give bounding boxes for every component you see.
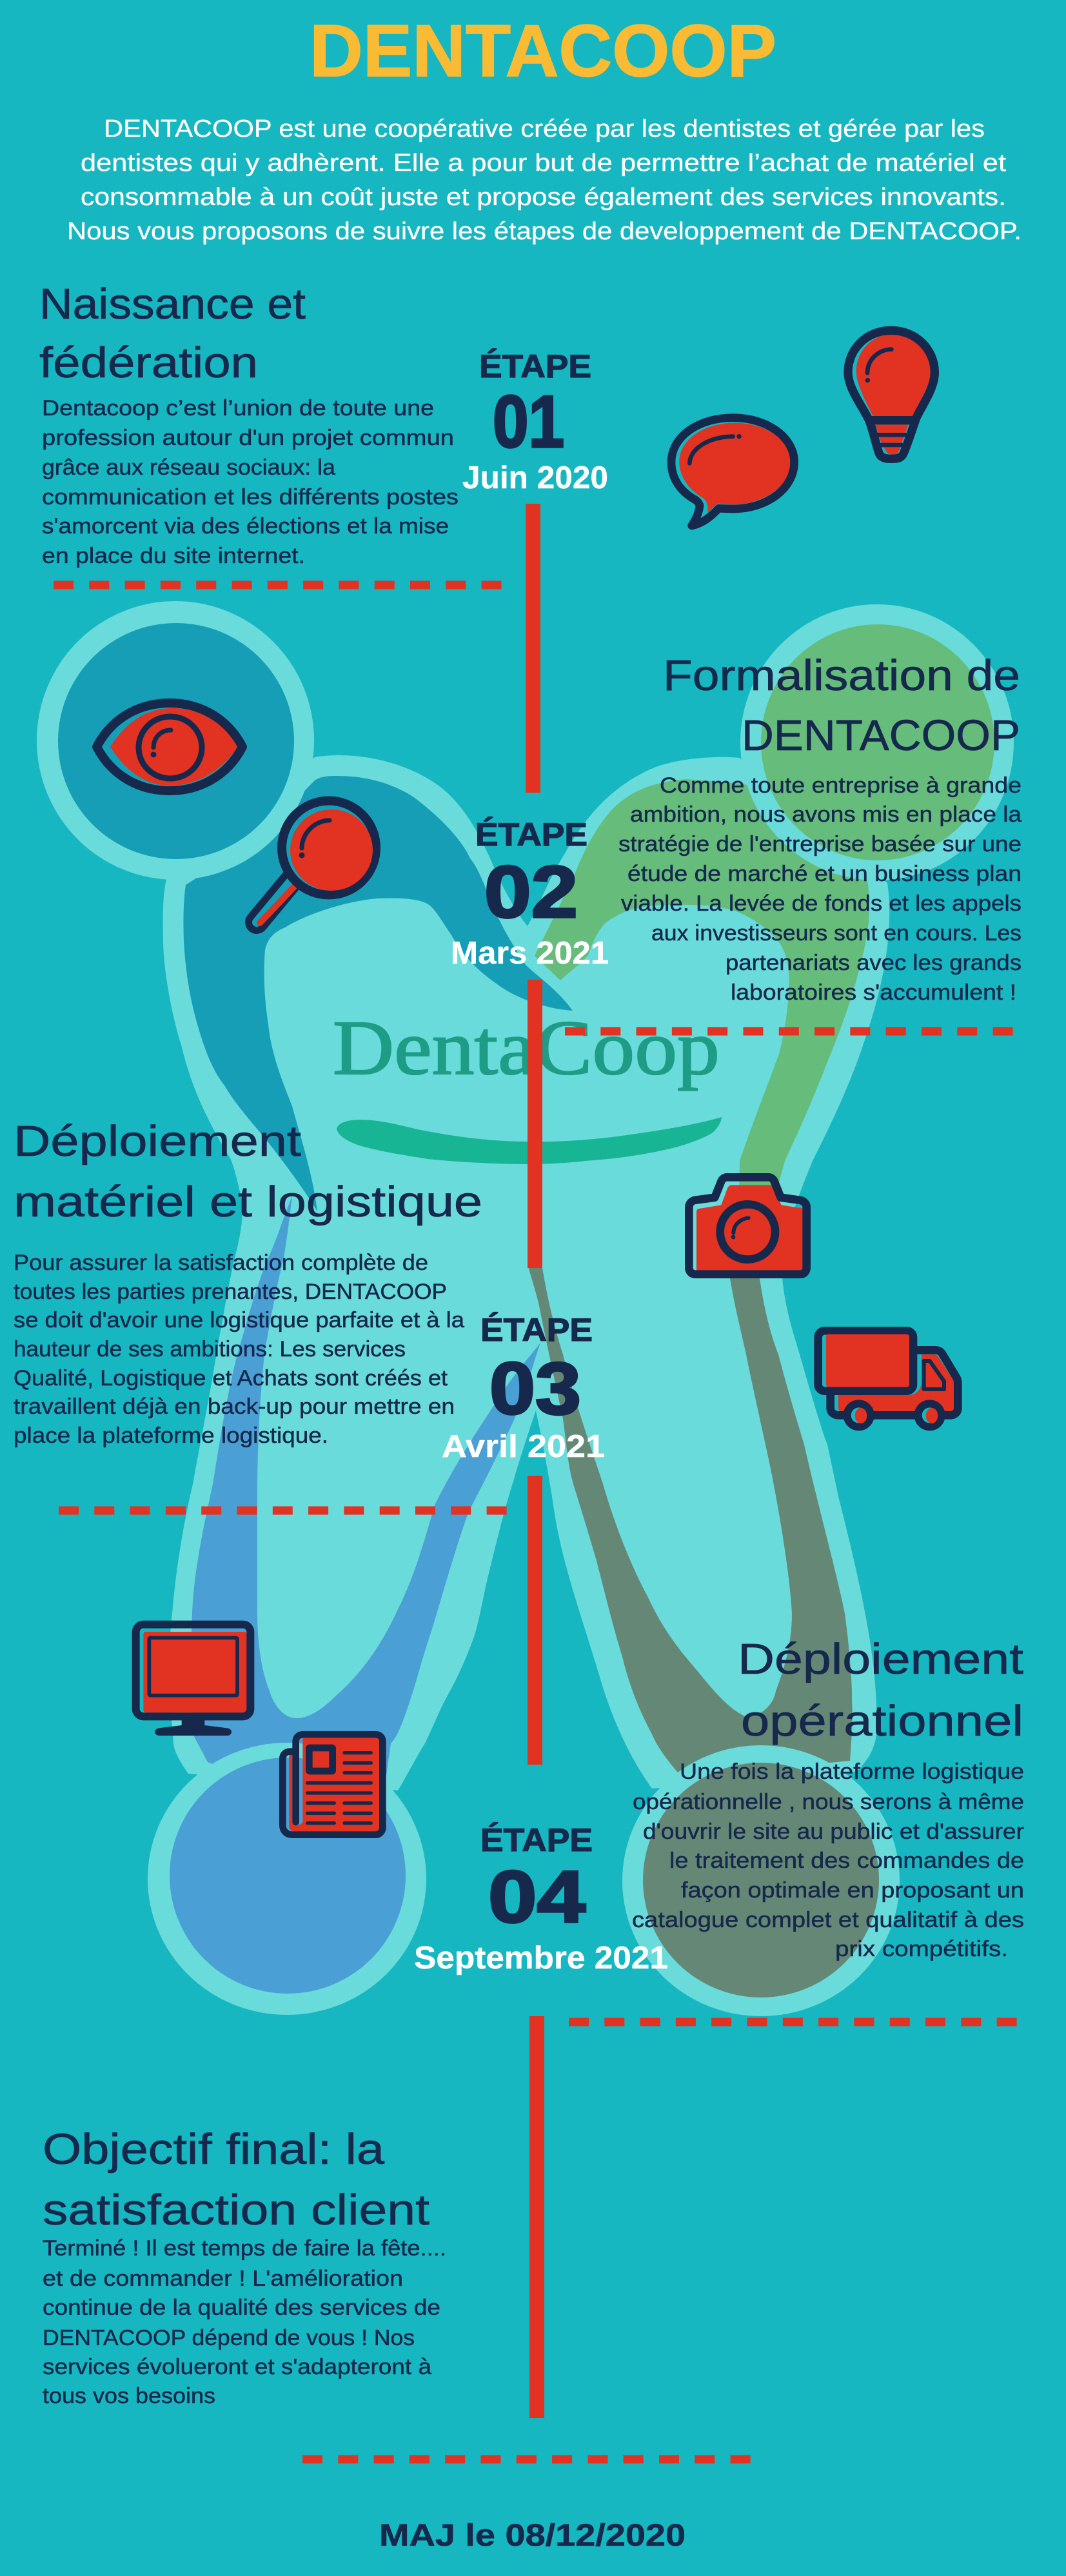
text block: step 3: Pour assurer la satisfaction complète de: [14, 1251, 428, 1275]
text block: step 1: grâce aux réseau sociaux: la: [42, 455, 335, 480]
heading: Formalisation de DENTACOOP: DENTACOOP: [742, 711, 1020, 760]
top-left blue lobe: [37, 601, 573, 1211]
icon: magnifier: [257, 801, 376, 923]
panel: step 3: [14, 1117, 605, 1464]
heading: Naissance et fédération: Naissance et: [39, 280, 306, 328]
intro text: [67, 115, 1022, 245]
intro text: consommable à un coût juste et propose également des services innovants.: [81, 184, 1006, 211]
text block: step 2: laboratoires s'accumulent !: [731, 980, 1016, 1005]
step label 03: ÉTAPE: [480, 1312, 593, 1348]
text block: step 1: en place du site internet.: [42, 544, 305, 568]
red timeline segments: [526, 504, 544, 2418]
text block: step 3: se doit d'avoir une logistique parfaite et à la: [14, 1308, 464, 1333]
panel: final objective: [43, 2125, 446, 2408]
text block: final objective: tous vos besoins: [43, 2384, 215, 2408]
text block: final objective: services évolueront et s'adapteront à: [43, 2355, 431, 2379]
step label 03: Avril 2021: [442, 1429, 605, 1464]
text block: step 2: ambition, nous avons mis en place la: [630, 802, 1022, 827]
step label 04: 04: [488, 1856, 586, 1938]
step label 04: ÉTAPE: [480, 1822, 593, 1858]
icon: truck: [818, 1331, 958, 1427]
text block: final objective: [43, 2236, 446, 2408]
text block: final objective: et de commander ! L'amélioration: [43, 2266, 403, 2291]
step label 03: 03: [489, 1348, 581, 1430]
title: DENTACOOP: [310, 10, 776, 92]
heading: Déploiement opérationnel: opérationnel: [741, 1697, 1023, 1745]
text block: step 3: Qualité, Logistique et Achats sont créés et: [14, 1366, 448, 1391]
text block: step 4: catalogue complet et qualitatif à des: [632, 1908, 1024, 1932]
text block: step 3: [14, 1251, 464, 1448]
heading: Formalisation de DENTACOOP: [663, 651, 1020, 760]
icon: camera: [689, 1177, 807, 1274]
text block: step 1: profession autour d'un projet commun: [42, 426, 454, 450]
DentaCoop logo: DentaCoop: [333, 1005, 720, 1091]
tooth background illustration: [37, 601, 1014, 2016]
heading: Naissance et fédération: fédération: [39, 339, 258, 387]
step label 02: [451, 817, 609, 971]
text block: step 2: stratégie de l'entreprise basée sur une: [618, 832, 1022, 857]
panel: step 2: [451, 651, 1022, 1005]
text block: step 3: hauteur de ses ambitions: Les services: [14, 1337, 406, 1362]
step label 02: ÉTAPE: [475, 817, 587, 853]
text block: step 1: s'amorcent via des élections et la mise: [42, 514, 449, 539]
icon: monitor: [136, 1625, 250, 1736]
heading: Objectif final: [43, 2125, 429, 2234]
text block: step 4: prix compétitifs.: [835, 1937, 1008, 1961]
bottom-left blue root: [148, 1196, 540, 2015]
top-right green lobe: [535, 604, 1014, 1225]
text block: final objective: Terminé ! Il est temps de faire la fête....: [43, 2236, 446, 2261]
heading: Déploiement matériel et logistique: [14, 1117, 482, 1226]
intro text: Nous vous proposons de suivre les étapes de developpement de DENTACOOP.: [67, 218, 1022, 245]
text block: step 2: viable. La levée de fonds et les appels: [621, 891, 1022, 916]
intro text: dentistes qui y adhèrent. Elle a pour but de permettre l’achat de matériel et: [81, 150, 1006, 177]
heading: Formalisation de DENTACOOP: Formalisation de: [663, 651, 1020, 700]
step label 04: Septembre 2021: [414, 1941, 668, 1976]
text block: step 4: [632, 1759, 1024, 1961]
heading: Déploiement opérationnel: Déploiement: [738, 1635, 1023, 1683]
step label 01: [462, 348, 608, 495]
heading: Naissance et fédération: [39, 280, 306, 387]
step label 01: Juin 2020: [462, 461, 608, 495]
text block: step 1: communication et les différents postes: [42, 485, 459, 510]
step label 04: [414, 1822, 668, 1976]
step label 01: ÉTAPE: [479, 348, 591, 384]
text block: step 1: Dentacoop c’est l’union de toute une: [42, 396, 434, 421]
DentaCoop logo: [333, 1005, 722, 1164]
heading: Déploiement opérationnel: [738, 1635, 1023, 1745]
text block: step 4: opérationnelle , nous serons à même: [633, 1790, 1024, 1814]
text block: step 4: Une fois la plateforme logistique: [680, 1759, 1024, 1784]
intro text: DENTACOOP est une coopérative créée par les dentistes et gérée par les: [104, 115, 985, 143]
heading: Déploiement matériel et logistique: matériel et logistique: [14, 1178, 482, 1226]
heading: Objectif final: satisfaction client: [43, 2186, 429, 2234]
step label 02: Mars 2021: [451, 936, 609, 971]
text block: step 2: partenariats avec les grands: [725, 951, 1022, 975]
text block: step 3: toutes les parties prenantes, DENTACOOP: [14, 1280, 447, 1304]
panel: step 1: [39, 280, 608, 568]
text block: step 3: place la plateforme logistique.: [14, 1423, 328, 1448]
panel: step 4: [414, 1635, 1024, 1976]
text block: step 4: d'ouvrir le site au public et d'assurer: [643, 1819, 1024, 1844]
text block: step 4: le traitement des commandes de: [669, 1848, 1024, 1873]
heading: Déploiement matériel et logistique: Déploiement: [14, 1117, 301, 1165]
text block: final objective: continue de la qualité des services de: [43, 2295, 440, 2320]
footer: update date: MAJ le 08/12/2020: [379, 2519, 686, 2553]
text block: step 1: [42, 396, 459, 568]
step label 03: [442, 1312, 605, 1464]
icon: eye: [97, 703, 242, 791]
text block: step 3: travaillent déjà en back-up pour mettre en: [14, 1394, 455, 1419]
bottom-right olive root: [528, 1213, 900, 2016]
icon: speech bubble and light bulb: [671, 330, 934, 526]
step label 01: 01: [493, 381, 564, 463]
text block: step 2: [618, 773, 1022, 1005]
step label 02: 02: [484, 851, 578, 933]
text block: step 2: Comme toute entreprise à grande: [660, 773, 1022, 798]
text block: step 2: étude de marché et un business plan: [627, 862, 1022, 886]
text block: step 4: façon optimale en proposant un: [681, 1878, 1024, 1903]
heading: Objectif final: Objectif final: la: [43, 2125, 385, 2174]
icon: newspaper: [282, 1734, 382, 1835]
text block: step 2: aux investisseurs sont en cours. Les: [651, 921, 1022, 946]
text block: final objective: DENTACOOP dépend de vous ! Nos: [43, 2326, 415, 2350]
